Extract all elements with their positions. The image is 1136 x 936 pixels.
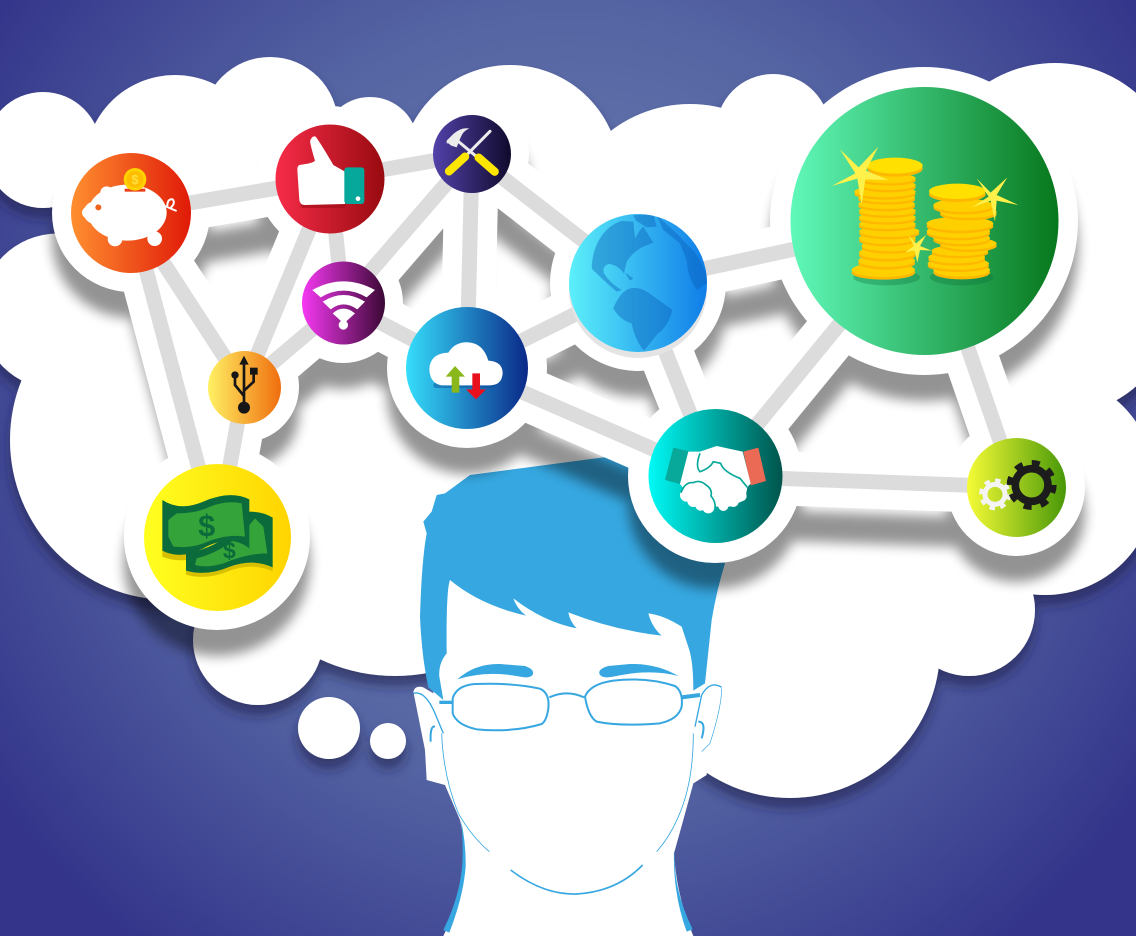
- screwdriver shaft and hammer handle: [457, 131, 490, 157]
- icon: thumbs up: [276, 124, 384, 234]
- coin slot: [125, 189, 145, 192]
- icon: piggy bank: [71, 153, 191, 273]
- upload arrow: [446, 366, 465, 393]
- bill shadow: [162, 551, 273, 577]
- coin: [124, 168, 146, 191]
- icon: money: $: [223, 537, 236, 563]
- large gear: [1015, 469, 1048, 501]
- ears and jaw lines: [413, 685, 722, 894]
- icon: money: $: [198, 509, 215, 543]
- front bill: [162, 495, 249, 555]
- icon: tools: [433, 115, 511, 193]
- hand outlines: [681, 453, 747, 508]
- icon: coins: [790, 87, 1058, 355]
- coin shadows: [853, 269, 993, 285]
- thumb hand: [297, 136, 345, 205]
- head: [413, 457, 725, 936]
- piggy tail: [165, 199, 177, 211]
- network halos: [52, 67, 1085, 630]
- network cast shadows: [52, 93, 1085, 656]
- icon: piggy bank: $: [131, 173, 139, 187]
- right stack: [927, 184, 997, 279]
- thought bubble small circles: [298, 697, 406, 759]
- network connection lines: [131, 154, 1016, 537]
- face and neck silhouette: [413, 663, 722, 936]
- icon: gears: [967, 438, 1066, 537]
- teal cuff: [665, 448, 690, 484]
- left stack: [852, 158, 923, 280]
- caribbean: [625, 273, 633, 281]
- icon: handshake: [648, 409, 782, 543]
- piggy eye: [95, 204, 101, 210]
- download arrow: [466, 373, 486, 399]
- glasses: [439, 679, 700, 730]
- icon: usb: [208, 351, 281, 424]
- icon: money: [144, 464, 291, 611]
- cloud shadow: [433, 383, 495, 388]
- yellow handles: [449, 157, 495, 172]
- north america: [592, 221, 653, 292]
- cuff: [344, 167, 364, 204]
- left eyebrow: [457, 664, 533, 679]
- sparkles: [832, 147, 1018, 263]
- greenland: [633, 214, 657, 227]
- red cuff: [743, 448, 766, 485]
- icon: globe: [569, 214, 708, 358]
- south america: [613, 288, 672, 351]
- hammer head: [447, 128, 469, 147]
- right eyebrow: [599, 664, 678, 677]
- neck edges: [443, 820, 693, 933]
- piggy body: [82, 185, 167, 246]
- thought cloud: [0, 57, 1136, 798]
- small gear: [985, 484, 1005, 504]
- back bill: [186, 512, 273, 573]
- africa and europe: [657, 215, 708, 290]
- icon: cloud transfer: [406, 307, 528, 429]
- icon: wifi: [302, 262, 385, 344]
- hair: [420, 457, 725, 700]
- hands: [680, 446, 751, 513]
- cloud shape: [429, 342, 503, 385]
